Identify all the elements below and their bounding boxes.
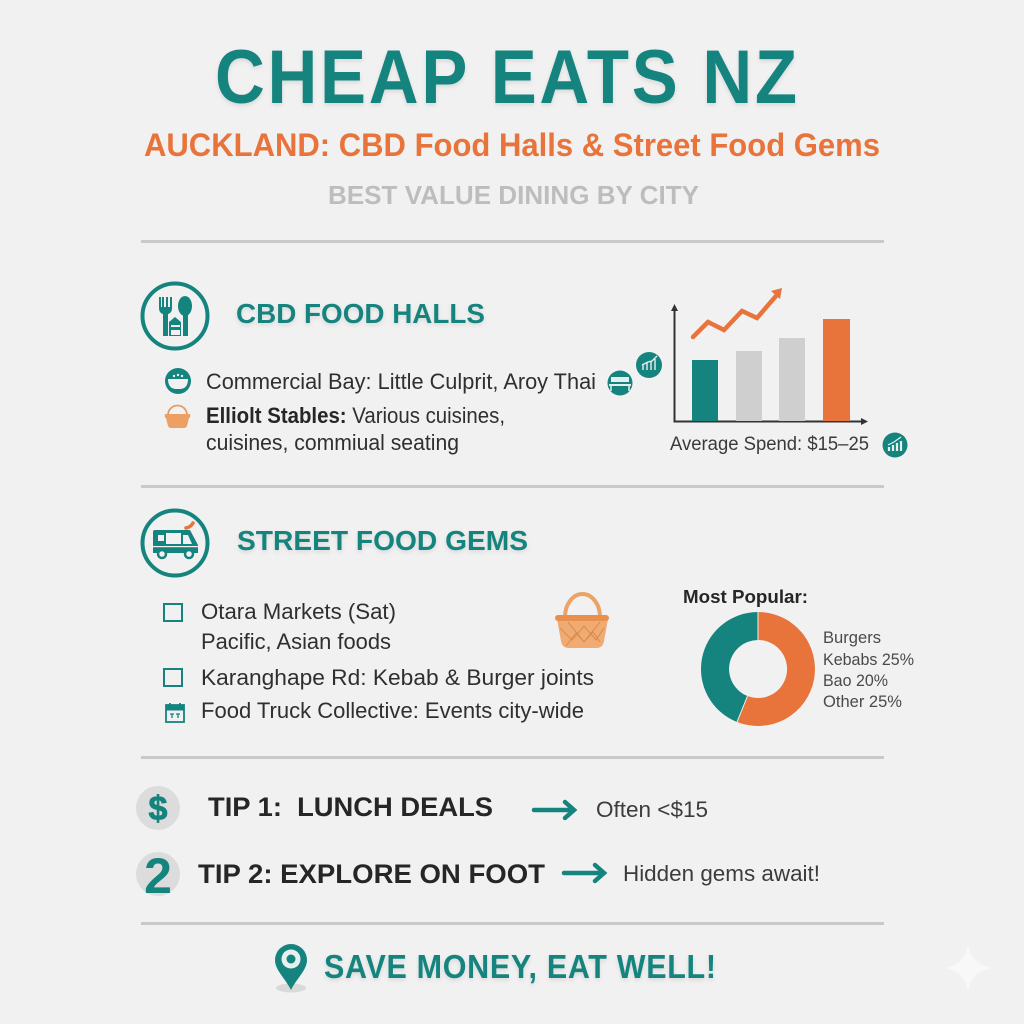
tip 1 detail: Often <$15: [596, 797, 708, 822]
list item: Otara Markets: Otara Markets (Sat): [201, 599, 396, 624]
icon: bench: [608, 370, 632, 396]
list item continuation: Pacific, Asian foods: [201, 629, 391, 654]
heading: CBD food halls: CBD FOOD HALLS: [236, 298, 485, 329]
list item: Commercial Bay: Commercial Bay: Little Culprit, Aroy Thai: [206, 369, 596, 394]
list item continuation: cuisines, commiual seating: [206, 430, 459, 455]
subtitle: AUCKLAND: CBD Food Halls & Street Food Gems: [144, 127, 880, 163]
arrow: [534, 802, 574, 818]
icon: fork, spoon and hall: [142, 284, 208, 348]
checkbox: [164, 604, 182, 621]
icon: basket: [165, 406, 190, 428]
heading: street food gems: STREET FOOD GEMS: [237, 525, 528, 556]
list item: Food Truck Collective: Food Truck Collective: Events city-wide: [201, 698, 584, 723]
tagline: BEST VALUE DINING BY CITY: [328, 180, 699, 210]
donut legend: Burgers: [823, 629, 881, 647]
icon: number two badge: 2: [144, 848, 172, 904]
icon: growth chart: [636, 352, 662, 378]
tip 2 heading: TIP 2: EXPLORE ON FOOT: [198, 859, 546, 889]
sparkle mark: [944, 944, 993, 992]
icon: food truck: [142, 510, 208, 576]
donut chart heading: Most Popular:: [683, 587, 808, 607]
list item: Elliott Stables: Elliolt Stables: Various cuisines,: [206, 403, 505, 428]
icon: dollar badge: $: [149, 790, 168, 828]
icon: number two badge: [136, 848, 180, 904]
donut legend: Other 25%: [823, 693, 902, 711]
panel: tips: [136, 786, 820, 904]
icon: bowl: [165, 368, 191, 394]
title: CHEAP EATS NZ: [215, 35, 797, 120]
tip 1 heading: TIP 1: LUNCH DEALS: [208, 792, 493, 822]
chart caption: Average Spend: $15–25: [670, 434, 869, 455]
panel: street food gems: [142, 510, 914, 726]
donut legend: Kebabs 25%: [823, 651, 914, 669]
donut legend: Bao 20%: [823, 672, 888, 690]
arrow: [564, 865, 604, 881]
footer call to action: [275, 944, 716, 992]
list item: Karanghape Rd: Karanghape Rd: Kebab & Burger joints: [201, 665, 594, 690]
icon: calendar: [166, 703, 184, 722]
panel: CBD food halls: [142, 284, 908, 458]
icon: map pin: [275, 944, 307, 992]
tip 2 detail: Hidden gems await!: [623, 861, 820, 886]
icon: woven basket: [555, 594, 609, 648]
icon: dollar badge: [136, 786, 180, 830]
checkbox: [164, 669, 182, 686]
donut chart: [701, 612, 815, 726]
closing slogan: SAVE MONEY, EAT WELL!: [324, 948, 716, 985]
icon: spend chart: [882, 432, 908, 458]
bar chart: average spend: [671, 288, 868, 425]
donut legend: [823, 629, 914, 711]
